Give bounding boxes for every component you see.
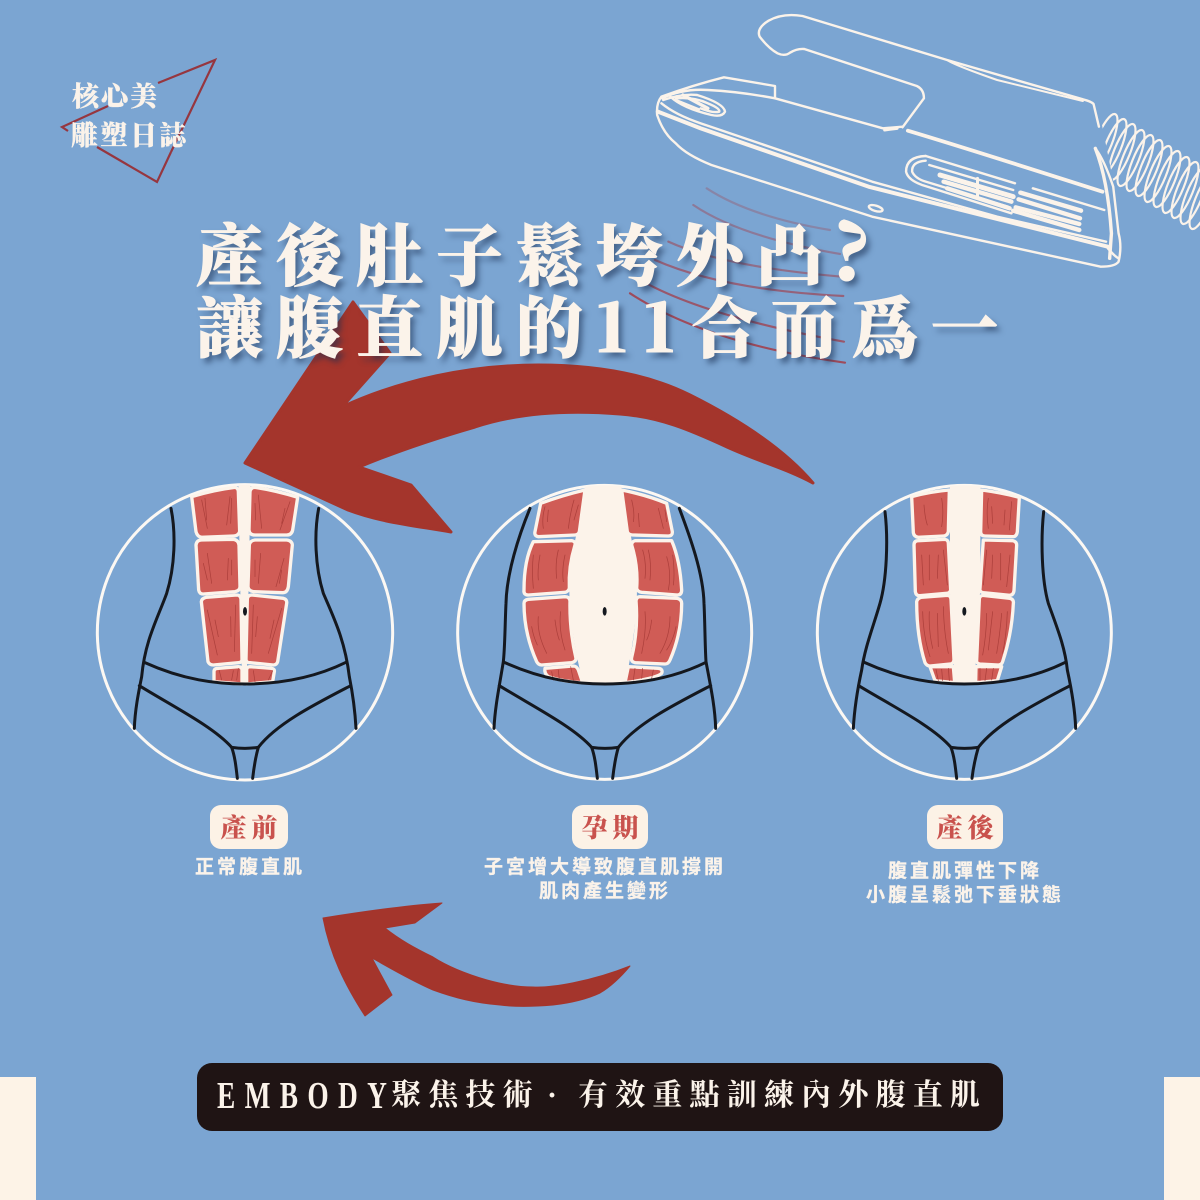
device handle	[759, 15, 1099, 127]
device nose grill	[663, 95, 725, 116]
muscles	[912, 483, 1019, 684]
small curved arrow	[323, 903, 630, 1016]
illustration layer	[60, 14, 1200, 1016]
device button	[868, 204, 883, 213]
caption: postpartum	[866, 860, 1064, 906]
device body	[657, 77, 1120, 267]
caption: pregnancy	[484, 856, 726, 902]
device: hose	[1102, 112, 1200, 230]
badge: pregnancy: 孕期	[581, 808, 644, 845]
panel: postpartum circle	[817, 483, 1111, 779]
navel	[962, 607, 966, 616]
banner text: 聚焦技術	[391, 1079, 540, 1112]
caption: postpartum: 腹直肌彈性下降	[888, 861, 1042, 882]
banner text: EMBODY	[217, 1075, 396, 1117]
badge: before pregnancy	[210, 805, 288, 849]
body outline	[853, 512, 1076, 778]
muscles	[524, 483, 682, 684]
banner text: 有效重點訓練內外腹直肌	[578, 1079, 987, 1112]
panel: pregnancy circle	[458, 483, 752, 779]
navel	[243, 607, 247, 616]
caption: pregnancy: 肌肉產生變形	[539, 881, 671, 902]
body outline	[134, 508, 356, 778]
caption: postpartum: 小腹呈鬆弛下垂狀態	[866, 885, 1064, 906]
banner text	[217, 1075, 987, 1117]
body outline	[494, 508, 716, 778]
navel	[603, 607, 607, 616]
corner block: right	[1164, 1077, 1200, 1200]
muscles	[192, 482, 298, 684]
title line 1: 產後肚子鬆垮外凸?	[196, 191, 871, 303]
bottom banner	[197, 1063, 1003, 1131]
logo triangle	[62, 60, 215, 182]
logo text line 2: 雕塑日誌	[71, 114, 189, 153]
caption: before pregnancy: 正常腹直肌	[195, 857, 305, 878]
panel: before pregnancy circle	[97, 482, 393, 780]
logo text line 1: 核心美	[72, 75, 159, 114]
vibration waves	[630, 188, 845, 363]
badge: postpartum: 產後	[936, 808, 998, 845]
device vent grill	[906, 156, 1011, 213]
badge: postpartum	[927, 805, 1003, 849]
caption: pregnancy: 子宮增大導致腹直肌撐開	[484, 857, 726, 878]
badge: before pregnancy: 產前	[220, 808, 282, 845]
title line 2: 讓腹直肌的11合而爲一	[196, 276, 1011, 372]
banner text: ·	[547, 1079, 564, 1112]
big curved arrow	[245, 302, 813, 532]
device: handpiece outline	[657, 15, 1120, 267]
badge: pregnancy	[572, 805, 648, 849]
corner block: left	[0, 1077, 36, 1200]
